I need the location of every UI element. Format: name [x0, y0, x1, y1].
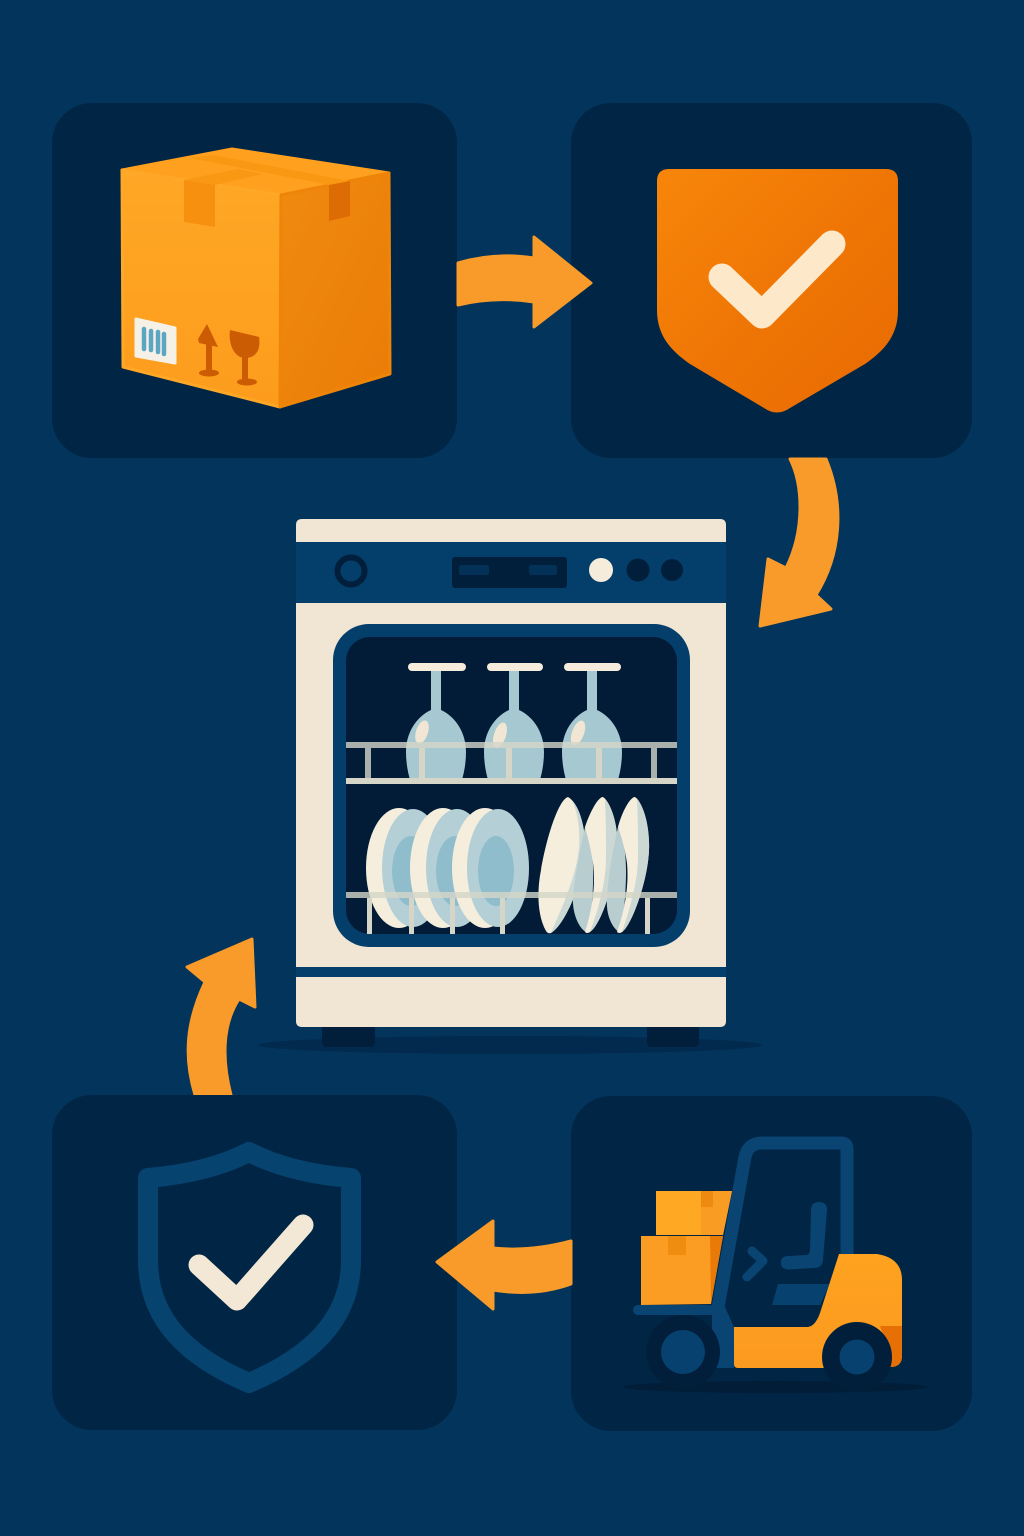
- arrow: shield to dishwasher: [760, 459, 838, 626]
- mast and cab frame: [717, 1143, 847, 1313]
- arrow: forklift to shield: [437, 1221, 571, 1309]
- glass 1: [406, 663, 466, 783]
- cabinet: [296, 519, 726, 1027]
- control panel: [296, 542, 726, 603]
- side plate 3: [607, 797, 649, 933]
- front wheel: [646, 1315, 720, 1389]
- arrow: box to shield: [458, 237, 591, 327]
- panel: parcel box: [52, 103, 457, 458]
- forks: [633, 1305, 715, 1315]
- feet: [322, 1027, 699, 1047]
- glass 3: [562, 663, 622, 783]
- dial: [338, 558, 364, 584]
- stacked boxes: [641, 1191, 732, 1305]
- side plate 2: [573, 797, 617, 933]
- floor plate: [772, 1284, 830, 1305]
- body: [734, 1254, 902, 1368]
- side-on plates: [538, 797, 649, 933]
- floor shadow: [258, 1036, 762, 1054]
- plate 2: [410, 808, 488, 928]
- plate 1: [366, 808, 444, 928]
- plate 3: [452, 808, 529, 928]
- icon: forklift: [623, 1143, 927, 1393]
- handling symbol: this way up: [198, 324, 219, 376]
- round plates: [366, 808, 529, 928]
- door window: [333, 624, 690, 947]
- buttons: [589, 558, 613, 582]
- upper rack: [346, 742, 677, 784]
- side plate 1: [538, 797, 585, 933]
- handling symbol: fragile: [230, 330, 259, 386]
- base stripe: [296, 967, 726, 977]
- shipping label: [136, 319, 175, 363]
- wine glasses: [406, 663, 622, 783]
- icon: cardboard box: [122, 149, 390, 407]
- arrow: shield to dishwasher return: [187, 939, 255, 1095]
- seat: [781, 1202, 827, 1270]
- panel: outlined shield: [52, 1095, 457, 1430]
- panel: forklift: [571, 1096, 972, 1431]
- icon: outlined shield with check: [148, 1152, 351, 1383]
- steering lever: [747, 1251, 763, 1277]
- rear wheel: [822, 1322, 892, 1392]
- icon: shield with check: [657, 169, 898, 412]
- ground shadow: [623, 1381, 927, 1393]
- dishwasher: [258, 519, 762, 1054]
- lower rack: [346, 892, 677, 934]
- glass 2: [484, 663, 544, 783]
- panel: orange shield: [571, 103, 972, 458]
- display: [452, 557, 567, 588]
